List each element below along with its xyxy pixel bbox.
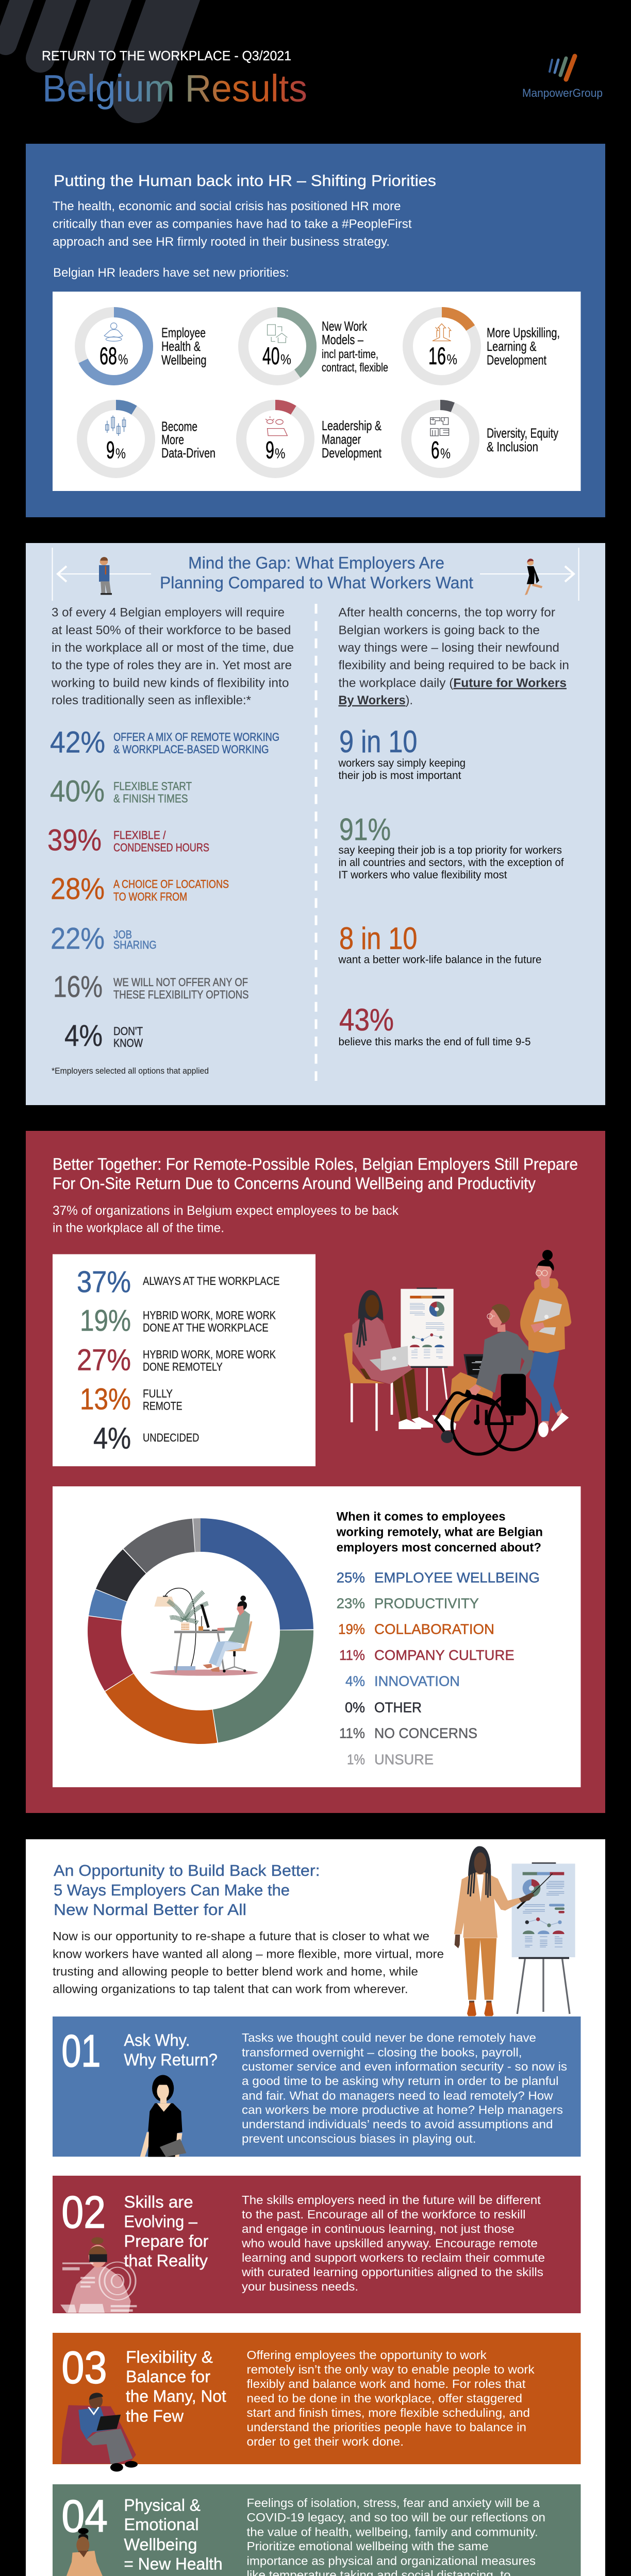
chart legend: OTHER (374, 1699, 422, 1715)
footnote: *Employers selected all options that applied (52, 1066, 209, 1076)
step title: that Reality (124, 2251, 208, 2270)
panel: better together (26, 1131, 605, 1813)
labels for priorities (161, 318, 560, 461)
intro text: approach and see HR firmly rooted in their business strategy. (53, 235, 390, 249)
step text: remotely isn’t the only way to enable people to work (246, 2363, 535, 2376)
intro text: trusting and allowing people to better blend work and home, while (53, 1965, 418, 1978)
heading: Better Together: For Remote-Possible Roles, Belgian Employers Still Prepare (53, 1155, 578, 1174)
labels for priorities: More Upskilling, (487, 325, 560, 341)
worker stats list (338, 724, 564, 1048)
stat 28%: TO WORK FROM (113, 890, 187, 903)
stat 4%: DON'T (113, 1025, 143, 1038)
stat 9 in 10: 9 in 10 (339, 724, 418, 759)
step 04 (43, 2484, 580, 2576)
stat 16%: WE WILL NOT OFFER ANY OF (113, 976, 248, 989)
step title: Emotional (124, 2515, 199, 2534)
intro text: know workers have wanted all along – more flexible, more virtual, more (53, 1947, 444, 1961)
step title: Wellbeing (124, 2535, 197, 2554)
gap arrows (53, 548, 579, 601)
labels for priorities: Become (161, 418, 197, 434)
stat 19% (80, 1304, 276, 1337)
panel: mind the gap (26, 543, 605, 1105)
step title: the Many, Not (126, 2387, 226, 2405)
stat 40%: & FINISH TIMES (113, 792, 188, 805)
step text: Offering employees the opportunity to work (246, 2348, 487, 2362)
step text (242, 2031, 567, 2145)
icon: meditation (104, 323, 123, 341)
donut: 16%: 16 (428, 342, 446, 369)
step title (126, 2348, 226, 2426)
step text: with curated learning opportunities aligned to the skills (241, 2265, 543, 2279)
stat 16%: 16% (53, 970, 103, 1004)
employer stats list (47, 725, 279, 1053)
donut: 9% data: % (115, 445, 126, 462)
stat 91%: IT workers who value flexibility most (338, 869, 507, 881)
stat 39% (47, 824, 209, 857)
stat 13%: FULLY (143, 1387, 173, 1400)
right paragraph: Belgian workers is going back to the (338, 623, 540, 637)
ManpowerGroup logo: ManpowerGroup (522, 87, 603, 99)
header title: RETURN TO THE WORKPLACE - Q3/2021 (42, 48, 291, 63)
heading: Planning Compared to What Workers Want (160, 573, 473, 592)
step text (241, 2193, 545, 2293)
icon: candlesticks (106, 416, 126, 436)
left paragraph: to the type of roles they are in. Yet most are (52, 658, 292, 672)
stats card (53, 1254, 315, 1466)
stat 4%: KNOW (113, 1037, 143, 1049)
stat 4%: 4% (93, 1421, 131, 1455)
step 02 (53, 2176, 580, 2313)
step text: a good time to be asking why return in order to be planful (242, 2074, 559, 2088)
stat 37%: ALWAYS AT THE WORKPLACE (143, 1275, 279, 1287)
right paragraph: By Workers). (338, 693, 413, 707)
left paragraph: in the workplace all or most of the time, due (52, 641, 294, 655)
stat 91%: 91% (339, 812, 391, 847)
white priorities card (53, 292, 580, 491)
stat 4%: UNDECIDED (143, 1431, 199, 1444)
stat 22% (51, 922, 157, 956)
step title: Skills are (124, 2193, 193, 2211)
header stripes (6, 0, 182, 98)
stat 27%: HYBRID WORK, MORE WORK (143, 1348, 276, 1361)
stat 8 in 10: 8 in 10 (339, 921, 418, 956)
chart legend: 4% (345, 1673, 365, 1689)
chart legend: 1% (347, 1752, 365, 1768)
chart legend: 23% (337, 1596, 365, 1612)
stat 42%: 42% (50, 725, 105, 759)
left paragraph: 3 of every 4 Belgian employers will require (52, 606, 285, 620)
stat 40%: 40% (50, 775, 105, 808)
intro text: 37% of organizations in Belgium expect employees to be back (53, 1204, 398, 1218)
stat 19%: 19% (80, 1304, 131, 1337)
illustration: presenter at flipchart (454, 1846, 575, 2016)
intro text: critically than ever as companies have had to take a #PeopleFirst (53, 217, 412, 231)
icon: linked hands (430, 418, 449, 436)
stat 91% (338, 812, 564, 881)
illustration: team around a flipchart (344, 1250, 571, 1454)
right paragraph (338, 606, 569, 707)
step text: Feelings of isolation, stress, fear and anxiety will be a (246, 2496, 540, 2510)
step text: flexibly and balance work and home. For roles that (246, 2377, 526, 2391)
labels for priorities: incl part-time, (322, 347, 378, 361)
donut: 6% (406, 405, 474, 473)
chart question (336, 1510, 543, 1554)
right paragraph: After health concerns, the top worry for (338, 606, 555, 620)
intro text (53, 1204, 398, 1235)
step text (246, 2348, 535, 2448)
stat 22%: 22% (51, 922, 105, 956)
stat 9 in 10: workers say simply keeping (338, 757, 466, 769)
stat 13%: 13% (80, 1382, 131, 1416)
stat 13%: REMOTE (143, 1399, 182, 1412)
flipchart (401, 1287, 454, 1411)
chart legend: EMPLOYEE WELLBEING (374, 1570, 540, 1586)
figure: man (99, 557, 112, 595)
step title: the Few (126, 2407, 184, 2426)
stat 40% (50, 775, 192, 808)
step title: Balance for (126, 2367, 210, 2386)
step title: Flexibility & (126, 2348, 213, 2366)
donut: 6%: 6 (431, 436, 439, 464)
left paragraph: working to build new kinds of flexibility into (51, 676, 289, 690)
chart legend (337, 1570, 540, 1768)
right paragraph: the workplace daily (Future for Workers (338, 676, 567, 690)
concern chart card (53, 1486, 580, 1787)
icon: leader with idea (265, 416, 287, 436)
step text: COVID-19 legacy, and so too will be our reflections on (246, 2511, 545, 2524)
right paragraph: flexibility and being required to be back in (338, 658, 569, 672)
step text: start and finish times, more flexible scheduling, and (246, 2406, 530, 2419)
step text (246, 2496, 545, 2576)
figure: meditating woman (43, 2528, 123, 2576)
donut: 40%: % (280, 351, 291, 367)
step 01 (53, 2016, 580, 2157)
header title: Belgium Results (42, 67, 307, 110)
stat 22%: SHARING (113, 939, 157, 952)
donut: 40%: 40 (262, 342, 279, 369)
step title: Prepare for (124, 2232, 209, 2250)
chart legend: COMPANY CULTURE (374, 1647, 514, 1663)
step text: your business needs. (242, 2280, 358, 2293)
step text: order to get their work done. (246, 2435, 404, 2448)
labels for priorities: Diversity, Equity (487, 426, 558, 441)
header title (42, 48, 307, 110)
donut: 6%: % (440, 445, 451, 462)
labels for priorities: More (161, 432, 184, 447)
step text: can workers be more productive at home? Help managers (242, 2103, 563, 2116)
stat 43% (338, 1003, 531, 1048)
step title (124, 2193, 209, 2270)
step text: and fair. What do managers need to lead remotely? How (242, 2089, 553, 2102)
intro text (53, 199, 412, 280)
centre dashed divider (314, 604, 318, 1081)
chart legend: 11% (339, 1725, 365, 1741)
stat 22%: JOB (113, 928, 132, 941)
step title: Why Return? (124, 2050, 218, 2069)
stat 13% (80, 1382, 182, 1416)
step 03 (53, 2333, 580, 2471)
stat 4%: 4% (64, 1019, 103, 1053)
man in wheelchair (432, 1304, 537, 1454)
step text: to the past. Encourage all of the workforce to reskill (242, 2208, 526, 2221)
stat 4% (64, 1019, 143, 1053)
step title: Physical & (124, 2496, 201, 2514)
heading: 5 Ways Employers Can Make the (54, 1881, 290, 1899)
step title: = New Health (124, 2554, 223, 2573)
left paragraph: at least 50% of their workforce to be based (52, 623, 291, 637)
stat 28%: A CHOICE OF LOCATIONS (113, 878, 229, 891)
chart legend: UNSURE (374, 1752, 434, 1768)
chart question: employers most concerned about? (337, 1540, 541, 1554)
illustration: remote worker at desk (150, 1588, 258, 1676)
step text: learning and support workers to reclaim their commute (242, 2251, 545, 2264)
labels for priorities: Leadership & (322, 418, 381, 433)
step text: transformed overnight – closing the books, payroll, (242, 2045, 522, 2059)
left paragraph (51, 606, 294, 707)
heading: Mind the Gap: What Employers Are (188, 554, 444, 572)
heading: For On-Site Return Due to Concerns Around WellBeing and Productivity (53, 1174, 536, 1193)
labels for priorities: New Work (322, 318, 368, 334)
stat 28%: 28% (51, 872, 105, 906)
step text: Prioritize emotional wellbeing with the same (246, 2539, 489, 2553)
intro text: in the workplace all of the time. (53, 1221, 224, 1235)
step text: the value of health, wellbeing, family and community. (246, 2525, 538, 2538)
step text: who would have upskilled anyway. Encourage remote (241, 2236, 538, 2250)
intro text (53, 1929, 444, 1996)
stat 27%: 27% (77, 1343, 131, 1377)
heading: An Opportunity to Build Back Better: (54, 1861, 320, 1879)
step text: prevent unconscious biases in playing out. (242, 2132, 476, 2145)
step text: customer service and even information security - so now is (242, 2060, 567, 2073)
labels for priorities: Wellbeing (161, 352, 206, 368)
stat 43%: 43% (339, 1003, 394, 1037)
stat 42%: & WORKPLACE-BASED WORKING (113, 743, 269, 756)
chart legend: PRODUCTIVITY (374, 1596, 479, 1612)
stat 39%: FLEXIBLE / (113, 829, 166, 842)
donut: 9% leadership (241, 405, 309, 473)
chart legend: INNOVATION (374, 1673, 460, 1689)
step title: Ask Why. (124, 2031, 190, 2049)
stat 39%: CONDENSED HOURS (113, 841, 209, 854)
figure: person in VR headset (60, 2237, 137, 2313)
donut: 68% (80, 312, 148, 380)
donut: 9% leadership: % (275, 445, 286, 462)
chart legend: COLLABORATION (374, 1621, 494, 1637)
step text: and engage in continuous learning, not just those (242, 2222, 514, 2235)
step text: Tasks we thought could never be done remotely have (242, 2031, 536, 2044)
labels for priorities: Health & (161, 338, 201, 354)
chart legend: 0% (345, 1699, 365, 1715)
donut: 9% data: 9 (106, 436, 114, 464)
icon: upward arrows (433, 324, 451, 341)
ManpowerGroup logo (522, 56, 603, 99)
panel: build back better (26, 1839, 605, 2576)
stat 4% (93, 1421, 199, 1455)
donut: 16%: % (446, 351, 457, 367)
stat 27% (77, 1343, 276, 1377)
stat 43%: believe this marks the end of full time 9-5 (338, 1036, 531, 1048)
figure: man on beanbag with laptop (61, 2393, 138, 2471)
stat 91%: say keeping their job is a top priority for workers (338, 844, 562, 856)
stat 40%: FLEXIBLE START (113, 780, 192, 792)
donut: 68%: % (118, 351, 128, 367)
labels for priorities: & Inclusion (487, 439, 538, 454)
step title (124, 2031, 218, 2069)
chart legend: 19% (338, 1621, 365, 1637)
stat 8 in 10 (338, 921, 541, 966)
stat 19%: DONE AT THE WORKPLACE (143, 1321, 269, 1334)
intro text: Now is our opportunity to re-shape a future that is closer to what we (53, 1929, 429, 1943)
donut: 9% leadership: 9 (265, 436, 274, 464)
step number: 02 (61, 2187, 106, 2238)
step number: 04 (61, 2490, 108, 2541)
chart legend: 11% (339, 1647, 365, 1663)
step text: understand individuals’ needs to avoid assumptions and (242, 2117, 553, 2131)
stat 8 in 10: want a better work-life balance in the future (338, 954, 541, 966)
heading (160, 554, 473, 592)
step text: understand the priorities people have to balance in (246, 2420, 526, 2434)
intro text: allowing organizations to tap talent that can work from wherever. (53, 1982, 408, 1996)
stat 39%: 39% (47, 824, 102, 857)
stat 42%: OFFER A MIX OF REMOTE WORKING (113, 731, 279, 743)
chart legend: 25% (337, 1570, 365, 1586)
heading: Putting the Human back into HR – Shifting Priorities (54, 172, 436, 190)
labels for priorities: Development (322, 445, 382, 461)
step text: importance as physical and organizational measures (246, 2554, 536, 2567)
figure: woman in black dress (140, 2075, 186, 2157)
donut chart of remote-work concerns (104, 1535, 297, 1727)
step number: 01 (61, 2025, 101, 2076)
donut: 40% (243, 312, 311, 380)
panel: shifting priorities (26, 144, 605, 517)
stat 16%: THESE FLEXIBILITY OPTIONS (113, 988, 248, 1001)
labels for priorities: Manager (322, 432, 361, 447)
icon: building and house (268, 325, 287, 343)
heading (53, 1155, 578, 1193)
figure: woman (525, 558, 542, 595)
labels for priorities: Learning & (487, 338, 537, 354)
step number: 03 (61, 2342, 107, 2393)
stat 91%: in all countries and sectors, with the exception of (338, 857, 564, 869)
seated woman with laptop (344, 1290, 433, 1431)
stat 27%: DONE REMOTELY (143, 1360, 223, 1373)
labels for priorities: contract, flexible (322, 361, 388, 374)
stat 37%: 37% (77, 1265, 131, 1299)
step title: Evolving – (124, 2212, 197, 2231)
step text: The skills employers need in the future will be different (242, 2193, 541, 2207)
labels for priorities: Data-Driven (161, 445, 215, 461)
labels for priorities: Development (487, 352, 547, 368)
step text: need to be done in the workplace, offer staggered (246, 2392, 522, 2405)
intro text: The health, economic and social crisis has positioned HR more (53, 199, 401, 213)
donut: 9% data (82, 405, 150, 473)
step title (124, 2496, 223, 2576)
stat 42% (50, 725, 279, 759)
standing woman with tablet (520, 1250, 571, 1437)
stat 28% (51, 872, 229, 906)
donut: 68%: 68 (99, 342, 117, 369)
labels for priorities: Employee (161, 325, 206, 341)
stat 9 in 10: their job is most important (338, 770, 461, 782)
chart question: working remotely, what are Belgian (336, 1525, 543, 1539)
intro text: Belgian HR leaders have set new priorities: (53, 266, 289, 280)
stat 9 in 10 (338, 724, 466, 782)
heading: New Normal Better for All (54, 1901, 246, 1919)
left paragraph: roles traditionally seen as inflexible:* (52, 693, 251, 707)
labels for priorities: Models – (322, 332, 363, 347)
chart question: When it comes to employees (337, 1510, 505, 1524)
stat 16% (53, 970, 248, 1004)
donut: 16% (408, 312, 476, 380)
chart legend: NO CONCERNS (374, 1725, 477, 1741)
right paragraph: way things were – losing their newfound (338, 641, 559, 655)
icons for priorities (104, 323, 451, 436)
stat 37% (77, 1265, 279, 1299)
stat 19%: HYBRID WORK, MORE WORK (143, 1309, 276, 1321)
heading (54, 1861, 320, 1919)
